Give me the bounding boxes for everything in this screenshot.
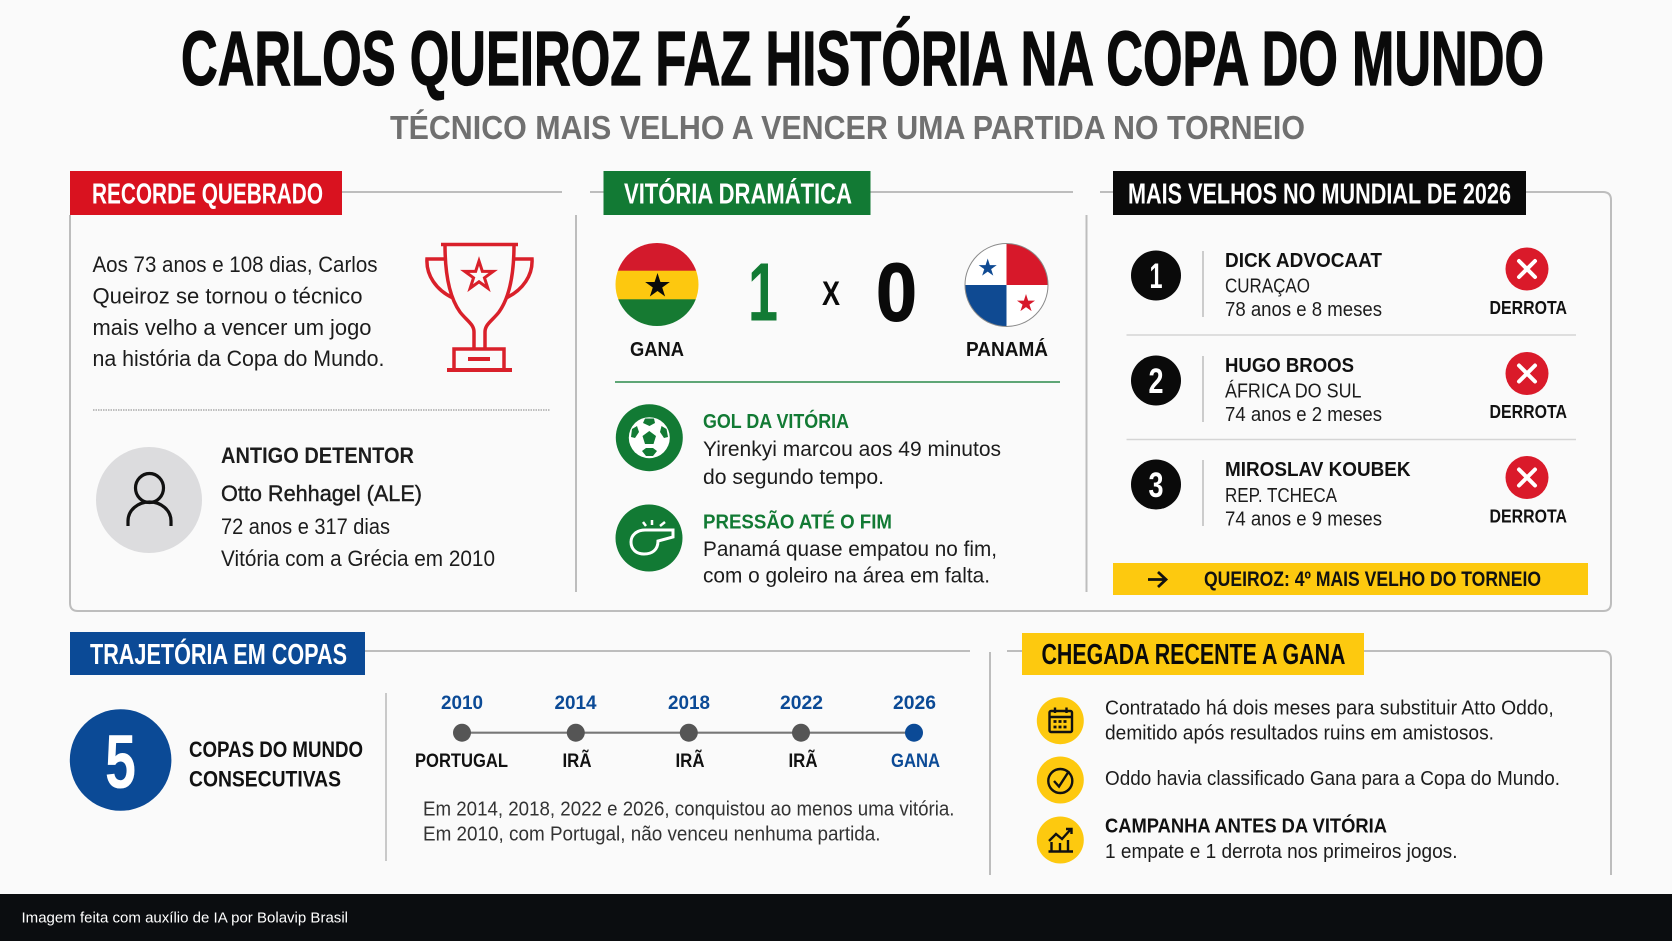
text block: timeline note: Em 2010, com Portugal, não venceu nenhuma partida. [423,824,880,846]
footer [0,894,1672,941]
text block: campanha: 1 empate e 1 derrota nos primeiros jogos. [1105,841,1458,863]
chart: timeline [415,693,940,772]
row: miroslav koubek: DERROTA [1490,506,1567,526]
text block: gol da vitória: GOL DA VITÓRIA [703,409,849,433]
icon: panama flag [965,243,1049,327]
label: panamá: PANAMÁ [966,338,1048,361]
chart: timeline: IRÃ [676,750,705,772]
row: dick advocaat: DERROTA [1490,298,1567,318]
panel: top frame [70,192,1611,611]
text block: contratado: Contratado há dois meses para substituir Atto Oddo, [1105,697,1554,719]
icon: ghana flag [615,243,699,327]
row: miroslav koubek: MIROSLAV KOUBEK [1225,459,1411,481]
panel: chegada recente a gana [990,633,1611,875]
heading: mais velhos no mundial de 2026 [1113,171,1526,215]
icon: former record holder avatar [96,447,202,553]
heading: vitória dramática: VITÓRIA DRAMÁTICA [624,176,852,210]
icon: trophy [427,244,532,370]
heading: vitória dramática [604,171,870,215]
chart: timeline: 2026 [893,693,936,714]
row: dick advocaat: DICK ADVOCAAT [1225,250,1382,272]
score: x: X [822,275,840,313]
row: miroslav koubek: 74 anos e 9 meses [1225,509,1382,531]
text block: campanha [1105,814,1458,863]
icon: check [1037,756,1084,804]
icon: soccer ball [616,404,683,471]
text block: antigo detentor: ANTIGO DETENTOR [221,443,414,468]
subtitle: TÉCNICO MAIS VELHO A VENCER UMA PARTIDA NO TORNEIO [390,109,1305,146]
text block: gol da vitória: Yirenkyi marcou aos 49 minutos [703,437,1001,461]
chart: timeline: 2018 [668,693,710,714]
chart: timeline: 2010 [441,693,483,714]
row: dick advocaat [1131,248,1567,321]
stat: 5 copas: COPAS DO MUNDO [189,737,363,762]
heading: chegada recente a gana: CHEGADA RECENTE A GANA [1042,639,1346,671]
text block: pressão até o fim: com o goleiro na área em falta. [703,564,990,588]
text block: oddo: Oddo havia classificado Gana para a Copa do Mundo. [1105,768,1560,790]
chart: timeline: PORTUGAL [415,751,508,772]
text block: record description: Queiroz se tornou o técnico [92,284,362,308]
text block: timeline note: Em 2014, 2018, 2022 e 2026, conquistou ao menos uma vitória. [423,799,954,821]
panel: mais velhos no mundial [1113,171,1588,595]
stat: 5 copas [70,709,363,811]
text block: timeline note [423,799,954,846]
callout: queiroz 4º mais velho [1113,563,1588,595]
stat: 5 copas: 5 [105,720,136,805]
icon: chart [1037,816,1084,864]
text block: antigo detentor [221,443,495,571]
text block: pressão até o fim [703,511,997,588]
text block: gol da vitória [703,409,1001,489]
score: ghana 1: 1 [748,246,778,338]
text block: record description: mais velho a vencer um jogo [92,315,372,340]
text block: gol da vitória: do segundo tempo. [703,465,884,489]
text block: contratado: demitido após resultados ruins em amistosos. [1105,722,1494,744]
icon: whistle [616,504,682,572]
text block: contratado [1105,697,1554,744]
row: dick advocaat: 1 [1150,257,1162,296]
row: miroslav koubek [1131,456,1567,531]
heading: mais velhos no mundial de 2026: MAIS VELHOS NO MUNDIAL DE 2026 [1128,178,1511,210]
chart: timeline: GANA [891,751,940,772]
stat: 5 copas: CONSECUTIVAS [189,767,341,792]
label: gana: GANA [630,339,684,361]
icon: calendar [1037,697,1084,744]
heading: trajetória em copas [70,632,365,675]
text block: pressão até o fim: Panamá quase empatou no fim, [703,537,997,561]
chart: timeline: 2014 [554,693,597,714]
panel: vitória dramática [604,171,1060,588]
callout: queiroz 4º mais velho: QUEIROZ: 4º MAIS VELHO DO TORNEIO [1204,568,1541,591]
text block: campanha: CAMPANHA ANTES DA VITÓRIA [1105,814,1387,838]
heading: chegada recente a gana [1022,633,1364,675]
heading: trajetória em copas: TRAJETÓRIA EM COPAS [90,637,347,671]
heading: recorde quebrado [70,171,342,215]
row: hugo broos: ÁFRICA DO SUL [1225,380,1362,403]
text block: antigo detentor: Vitória com a Grécia em 2010 [221,546,495,571]
score: panama 0: 0 [876,246,917,338]
row: dick advocaat: CURAÇAO [1225,276,1310,298]
text block: antigo detentor: 72 anos e 317 dias [221,514,390,539]
row: miroslav koubek: 3 [1148,466,1164,505]
row: hugo broos: HUGO BROOS [1225,355,1354,377]
row: dick advocaat: 78 anos e 8 meses [1225,299,1382,321]
heading: recorde quebrado: RECORDE QUEBRADO [92,178,323,210]
row: hugo broos [1131,352,1567,426]
footer: Imagem feita com auxílio de IA por Bolavip Brasil [22,911,348,927]
row: hugo broos: 74 anos e 2 meses [1225,404,1382,426]
chart: timeline: IRÃ [562,750,592,772]
text block: record description: na história da Copa do Mundo. [92,346,384,371]
panel: trajetória em copas [70,632,970,861]
text block: record description: Aos 73 anos e 108 dias, Carlos [92,252,378,277]
text block: record description [92,252,384,371]
chart: timeline: IRÃ [788,750,818,772]
row: hugo broos: DERROTA [1490,402,1567,422]
panel: recorde quebrado [70,171,550,571]
chart: timeline: 2022 [780,693,823,714]
text block: antigo detentor: Otto Rehhagel (ALE) [221,481,422,506]
row: miroslav koubek: REP. TCHECA [1225,485,1338,507]
row: hugo broos: 2 [1148,362,1164,401]
text block: pressão até o fim: PRESSÃO ATÉ O FIM [703,511,892,534]
